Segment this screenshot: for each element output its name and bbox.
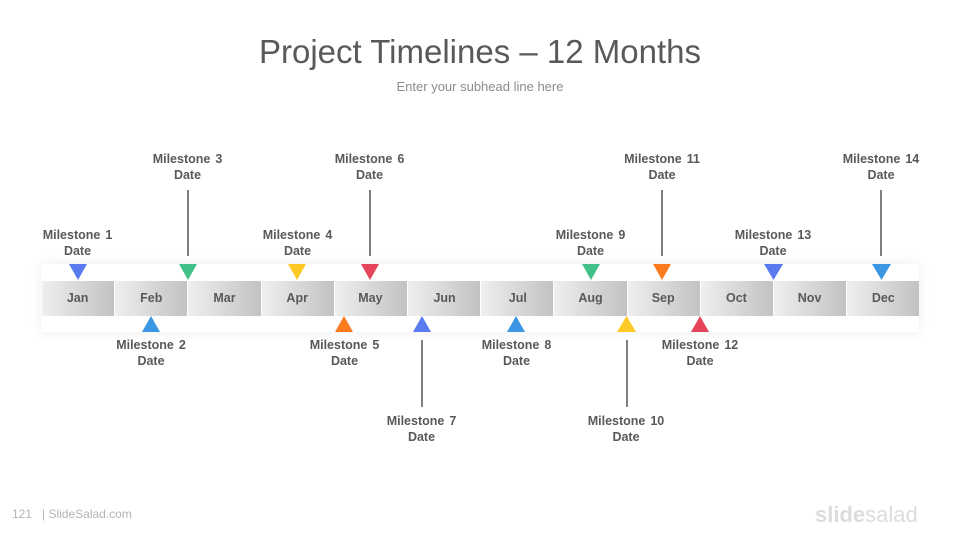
label: milestone 7 bbox=[387, 414, 456, 444]
month: Jun: Jun bbox=[433, 291, 456, 305]
connector: milestone 10 bbox=[626, 340, 628, 407]
connector: milestone 7 bbox=[421, 340, 423, 407]
label: milestone 5: Milestone 5 bbox=[310, 338, 379, 352]
month: Apr: Apr bbox=[286, 291, 308, 305]
marker: milestone 10 bbox=[617, 316, 636, 332]
timeline band bbox=[41, 264, 919, 332]
month: Oct: Oct bbox=[726, 291, 747, 305]
label: milestone 9 bbox=[556, 228, 625, 258]
logo: slidesalad: slidesalad bbox=[815, 502, 918, 527]
label: milestone 10: Date bbox=[612, 430, 640, 444]
label: milestone 7: Milestone 7 bbox=[387, 414, 456, 428]
label: milestone 14: Milestone 14 bbox=[843, 152, 919, 166]
marker: milestone 7 bbox=[413, 316, 431, 332]
label: milestone 11 bbox=[624, 152, 700, 182]
label: milestone 6: Date bbox=[356, 168, 383, 182]
connector: milestone 6 bbox=[369, 190, 371, 256]
month: Sep: Sep bbox=[652, 291, 675, 305]
page number: 121 | SlideSalad.com bbox=[12, 507, 132, 521]
label: milestone 12: Milestone 12 bbox=[662, 338, 738, 352]
label: milestone 1: Date bbox=[64, 244, 91, 258]
label: milestone 11: Date bbox=[648, 168, 676, 182]
month: Mar: Mar bbox=[213, 291, 236, 305]
label: milestone 2: Milestone 2 bbox=[116, 338, 186, 352]
marker: milestone 14 bbox=[872, 264, 891, 280]
subhead: Enter your subhead line here bbox=[397, 79, 563, 94]
label: milestone 6 bbox=[335, 152, 404, 182]
marker: milestone 6 bbox=[361, 264, 379, 280]
label: milestone 12 bbox=[662, 338, 738, 368]
label: milestone 8 bbox=[482, 338, 551, 368]
month: Feb: Feb bbox=[140, 291, 162, 305]
month: Jul: Jul bbox=[509, 291, 527, 305]
month: Aug bbox=[554, 281, 627, 316]
marker: milestone 5 bbox=[335, 316, 353, 332]
month: Dec bbox=[847, 281, 919, 316]
title: Project Timelines – 12 Months bbox=[259, 33, 701, 70]
marker: milestone 3 bbox=[179, 264, 197, 280]
month: Dec: Dec bbox=[872, 291, 895, 305]
month: Nov: Nov bbox=[798, 291, 821, 305]
marker: milestone 2 bbox=[142, 316, 160, 332]
month: Jan bbox=[42, 281, 114, 316]
month: Mar bbox=[188, 281, 261, 316]
label: milestone 13: Milestone 13 bbox=[735, 228, 811, 242]
label: milestone 13: Date bbox=[759, 244, 787, 258]
label: milestone 3: Date bbox=[174, 168, 201, 182]
label: milestone 14 bbox=[843, 152, 920, 182]
label: milestone 6: Milestone 6 bbox=[335, 152, 404, 166]
label: milestone 5 bbox=[310, 338, 379, 368]
month: May: May bbox=[358, 291, 383, 305]
label: milestone 10: Milestone 10 bbox=[588, 414, 664, 428]
label: milestone 4: Milestone 4 bbox=[263, 228, 332, 242]
label: milestone 1: Milestone 1 bbox=[43, 228, 112, 242]
label: milestone 13 bbox=[735, 228, 811, 258]
label: milestone 4 bbox=[263, 228, 332, 258]
marker: milestone 9 bbox=[582, 264, 600, 280]
marker: milestone 4 bbox=[288, 264, 306, 280]
month: Aug: Aug bbox=[578, 291, 603, 305]
label: milestone 2 bbox=[116, 338, 186, 368]
label: milestone 10 bbox=[588, 414, 664, 444]
marker: milestone 12 bbox=[691, 316, 709, 332]
month: Jan: Jan bbox=[67, 291, 88, 305]
label: milestone 3 bbox=[153, 152, 222, 182]
label: milestone 4: Date bbox=[284, 244, 311, 258]
label: milestone 8: Milestone 8 bbox=[482, 338, 551, 352]
month: May bbox=[335, 281, 407, 316]
month: Feb bbox=[115, 281, 187, 316]
label: milestone 8: Date bbox=[503, 354, 530, 368]
connector: milestone 14 bbox=[880, 190, 882, 256]
label: milestone 9: Milestone 9 bbox=[556, 228, 625, 242]
month: Jun bbox=[408, 281, 480, 316]
label: milestone 12: Date bbox=[686, 354, 714, 368]
marker: milestone 13 bbox=[764, 264, 783, 280]
month: Jul bbox=[481, 281, 553, 316]
label: milestone 1 bbox=[43, 228, 112, 258]
label: milestone 2: Date bbox=[137, 354, 165, 368]
connector: milestone 11 bbox=[661, 190, 663, 256]
month: Sep bbox=[628, 281, 700, 316]
label: milestone 3: Milestone 3 bbox=[153, 152, 222, 166]
marker: milestone 8 bbox=[507, 316, 525, 332]
label: milestone 11: Milestone 11 bbox=[624, 152, 700, 166]
label: milestone 7: Date bbox=[408, 430, 435, 444]
marker: milestone 11 bbox=[653, 264, 671, 280]
label: milestone 14: Date bbox=[867, 168, 895, 182]
marker: milestone 1 bbox=[69, 264, 87, 280]
month: Apr bbox=[262, 281, 334, 316]
month: Nov bbox=[774, 281, 846, 316]
month: Oct bbox=[701, 281, 773, 316]
label: milestone 9: Date bbox=[577, 244, 604, 258]
connector: milestone 3 bbox=[187, 190, 189, 256]
label: milestone 5: Date bbox=[331, 354, 358, 368]
